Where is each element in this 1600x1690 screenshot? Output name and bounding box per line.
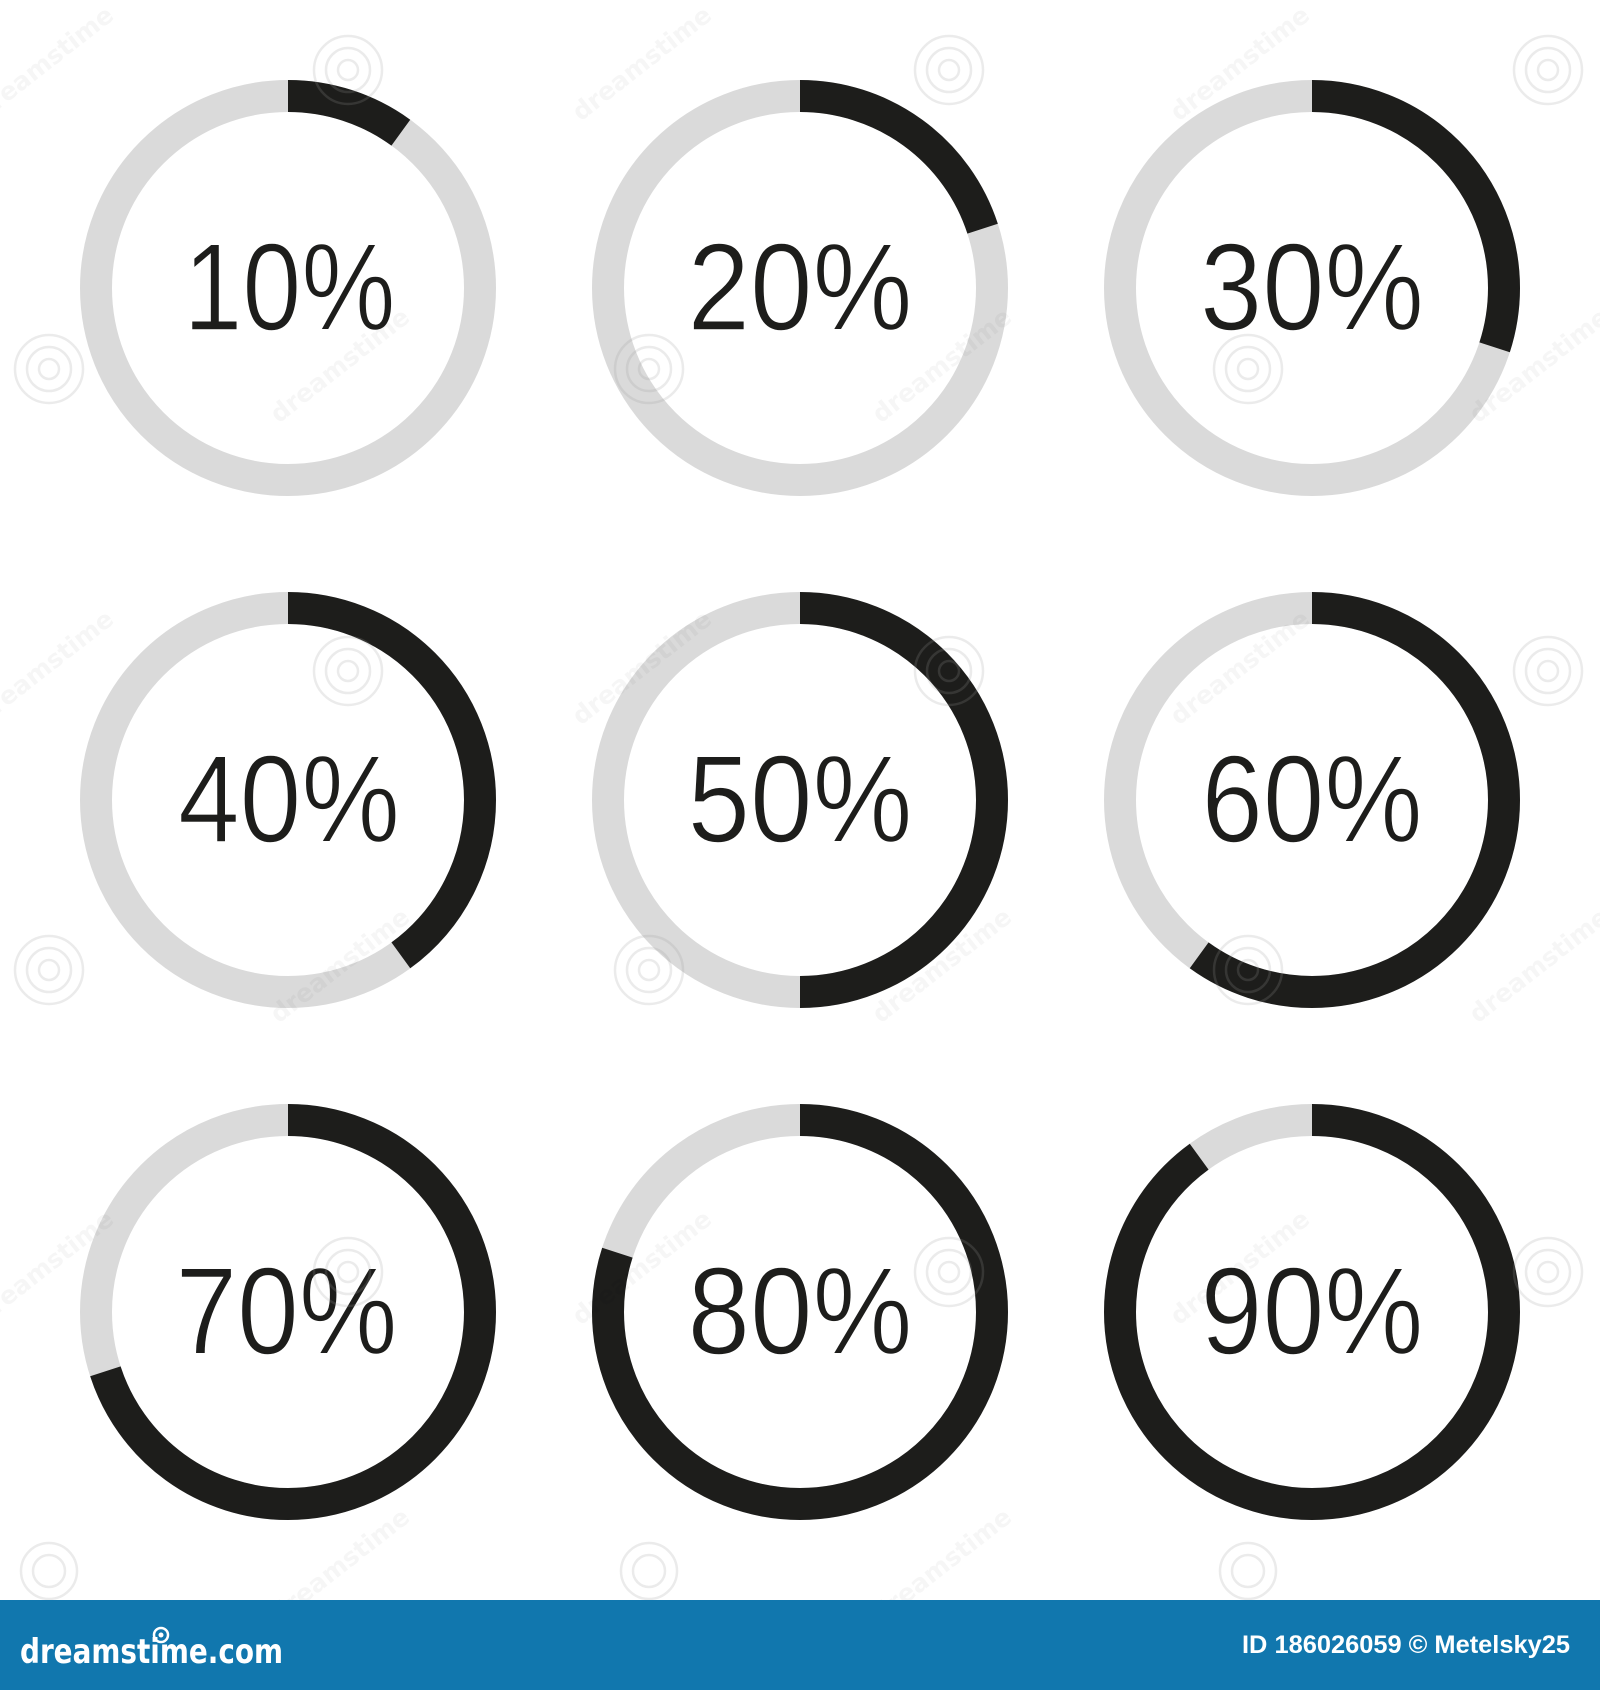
watermark pattern: dreamstime [866,302,1017,429]
gauge: 70% [96,1120,480,1504]
gauge: 30% [1120,96,1504,480]
footer credit: image ID and author: ID 186026059 © Metelsky25 [1242,1631,1570,1659]
gauge: 90% [1120,1120,1504,1504]
gauge: 60%: 60% [1202,731,1422,869]
footer logo: dreamstime.com: dreamstime.com [20,1632,283,1672]
watermark pattern: dreamstime [566,0,717,127]
gauge: 80%: 80% [688,1243,912,1381]
gauge: 10%: 10% [184,219,396,357]
gauge: 40% [96,608,480,992]
gauge: 50% [608,608,992,992]
gauge: 70%: 70% [176,1243,398,1381]
gauge: 20% [608,96,992,480]
watermark pattern: dreamstime [866,1502,1017,1629]
gauge: 20%: 20% [688,219,912,357]
watermark pattern: dreamstime [264,1502,415,1629]
gauge: 90%: 90% [1200,1243,1424,1381]
watermark pattern: dreamstime [566,604,717,731]
gauge: 40%: 40% [178,731,400,869]
watermark pattern: dreamstime [1164,0,1315,127]
gauge: 80% [608,1120,992,1504]
gauge: 60% [1120,608,1504,992]
watermark pattern: dreamstime [1164,604,1315,731]
gauge: 30%: 30% [1200,219,1424,357]
watermark pattern: dreamstime [264,302,415,429]
watermark pattern: dreamstime [1164,1204,1315,1331]
gauge: 10% [96,96,480,480]
watermark pattern: dreamstime [866,902,1017,1029]
watermark pattern: dreamstime [566,1204,717,1331]
gauge: 50%: 50% [688,731,912,869]
footer bar [0,1600,1600,1690]
watermark pattern: dreamstime [264,902,415,1029]
